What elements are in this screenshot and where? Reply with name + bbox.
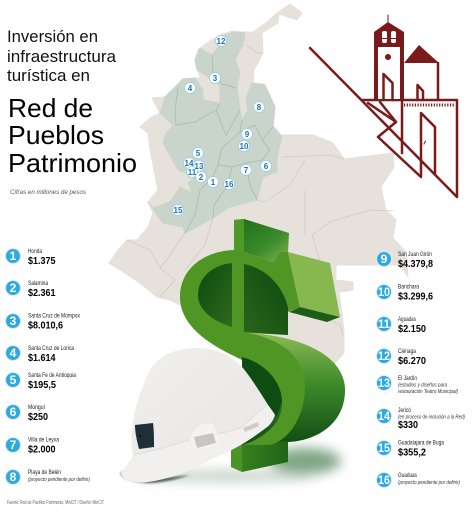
- map: numbered markers: 9: [245, 130, 250, 139]
- stem: [231, 445, 242, 472]
- map: numbered markers: 1: [211, 178, 216, 187]
- item 6: [5, 404, 48, 423]
- map: numbered markers: 14: [185, 159, 194, 168]
- title: main: Red de: [8, 93, 93, 123]
- item 2: [5, 280, 56, 299]
- item 4: $1.614: [28, 353, 56, 364]
- title: main: [8, 93, 137, 178]
- item 7: $2.000: [28, 444, 56, 456]
- map: national territory: [109, 4, 408, 400]
- hole right: [244, 264, 288, 335]
- item 11: 11: [378, 319, 391, 331]
- subtitle: units: Cifras en millones de pesos: [10, 190, 86, 196]
- item 1: Honda: [28, 248, 42, 255]
- item 15: Guadalajara de Buga: [398, 440, 444, 446]
- item 14: Jericó: [398, 407, 411, 414]
- hole lower: [242, 357, 282, 420]
- map: numbered markers: 13: [195, 162, 204, 171]
- title: intro: turística en: [7, 67, 90, 85]
- item 1: [5, 248, 56, 267]
- lower extrusion: [240, 333, 345, 446]
- flag light face: [288, 252, 340, 317]
- item 13: El Jardín: [398, 375, 417, 382]
- map: numbered markers: 10: [240, 142, 249, 151]
- brim and band: [121, 405, 275, 482]
- upper bar: [234, 219, 289, 262]
- map: numbered markers: 2: [199, 173, 204, 182]
- title: intro: infraestructura: [7, 48, 117, 66]
- item 15: 15: [378, 443, 391, 455]
- item 5: 5: [10, 373, 17, 387]
- item 10: $3.299,6: [398, 292, 433, 302]
- title: intro: [7, 28, 117, 85]
- brim shadow: [120, 472, 190, 483]
- item 14: [376, 407, 465, 431]
- map of Colombia: [109, 4, 408, 400]
- item 14: $330: [398, 420, 418, 431]
- front S: [180, 250, 305, 445]
- map: numbered markers: 3: [213, 74, 218, 83]
- tab: [190, 423, 220, 452]
- illustration: dollar sign: [135, 219, 345, 481]
- item 7: 7: [10, 438, 17, 452]
- item 10: [376, 284, 433, 302]
- item 8: [5, 469, 90, 485]
- item 7: Villa de Leyva: [28, 436, 59, 444]
- map: numbered markers: 6: [264, 162, 269, 171]
- map: numbered markers: 12: [217, 37, 226, 46]
- map: numbered markers: 7: [244, 166, 249, 175]
- footer: source: Fuente: Red de Pueblos Patrimonio, MinCIT / Diseño: MinCIT: [7, 500, 104, 506]
- map: numbered markers: 11: [188, 168, 197, 177]
- item 11: $2.150: [398, 324, 426, 335]
- list: left column projects: [5, 248, 90, 485]
- item 9: [376, 251, 433, 270]
- item 11: [376, 316, 426, 335]
- item 16: Guaduas: [398, 472, 417, 479]
- item 16: [376, 472, 460, 488]
- item 12: [376, 348, 426, 367]
- item 5: Santa Fe de Antioquia: [28, 372, 76, 379]
- item 9: San Juan Girón: [398, 251, 432, 258]
- item 16: 16: [378, 475, 390, 487]
- item 8: (proyecto pendiente por definir): [28, 477, 90, 483]
- item 3: 3: [10, 314, 17, 328]
- item 2: Salamina: [28, 280, 48, 287]
- icon: church logo: [310, 15, 457, 197]
- map: numbered markers: 4: [188, 84, 193, 93]
- item 6: 6: [10, 405, 17, 419]
- item 9: 9: [381, 252, 388, 266]
- shadow: [135, 448, 341, 481]
- shell: [121, 348, 275, 482]
- map: numbered markers: 5: [196, 149, 201, 158]
- item 3: [5, 312, 81, 332]
- item 6: Monguí: [28, 404, 45, 411]
- item 11: Aguadas: [398, 316, 416, 323]
- item 13: (estudios y diseños para: [398, 382, 447, 388]
- item 14: 14: [378, 411, 391, 423]
- item 13: [376, 375, 458, 395]
- item 12: 12: [378, 351, 390, 363]
- item 10: Barichara: [398, 284, 419, 290]
- illustration: hard hat: [120, 348, 275, 483]
- item 12: $6.270: [398, 356, 426, 367]
- map: numbered markers: 16: [225, 180, 234, 189]
- hole left: [198, 263, 232, 327]
- clip: [135, 423, 154, 449]
- item 3: $8.010,6: [28, 320, 63, 332]
- item 15: $355,2: [398, 448, 426, 458]
- item 4: Santa Cruz de Lorica: [28, 345, 74, 352]
- map: highlighted departments: [148, 32, 282, 233]
- item 1: $1.375: [28, 256, 56, 267]
- flag underside: [289, 307, 340, 322]
- item 1: 1: [10, 249, 17, 263]
- item 2: 2: [10, 281, 17, 295]
- map: numbered markers: 15: [174, 206, 183, 215]
- item 5: $195,5: [28, 380, 56, 391]
- item 9: $4.379,8: [398, 259, 433, 270]
- item 4: [5, 345, 74, 364]
- item 13: restauración Teatro Municipal): [398, 389, 458, 395]
- item 10: 10: [378, 287, 390, 299]
- item 8: Playa de Belén: [28, 469, 61, 476]
- list: right column projects: [376, 251, 465, 488]
- item 15: [376, 440, 444, 458]
- title: intro: Inversión en: [7, 28, 98, 46]
- item 4: 4: [10, 346, 17, 360]
- item 12: Ciénaga: [398, 348, 416, 355]
- item 13: 13: [378, 378, 390, 390]
- item 2: $2.361: [28, 288, 56, 299]
- item 6: $250: [28, 412, 48, 423]
- item 8: 8: [10, 470, 17, 484]
- title: main: Patrimonio: [8, 148, 137, 178]
- map: numbered markers: [172, 36, 272, 216]
- item 7: [5, 436, 59, 456]
- title: main: Pueblos: [8, 120, 104, 150]
- item 3: Santa Cruz de Mompox: [28, 312, 81, 320]
- item 5: [5, 372, 76, 391]
- map: numbered markers: 8: [257, 103, 262, 112]
